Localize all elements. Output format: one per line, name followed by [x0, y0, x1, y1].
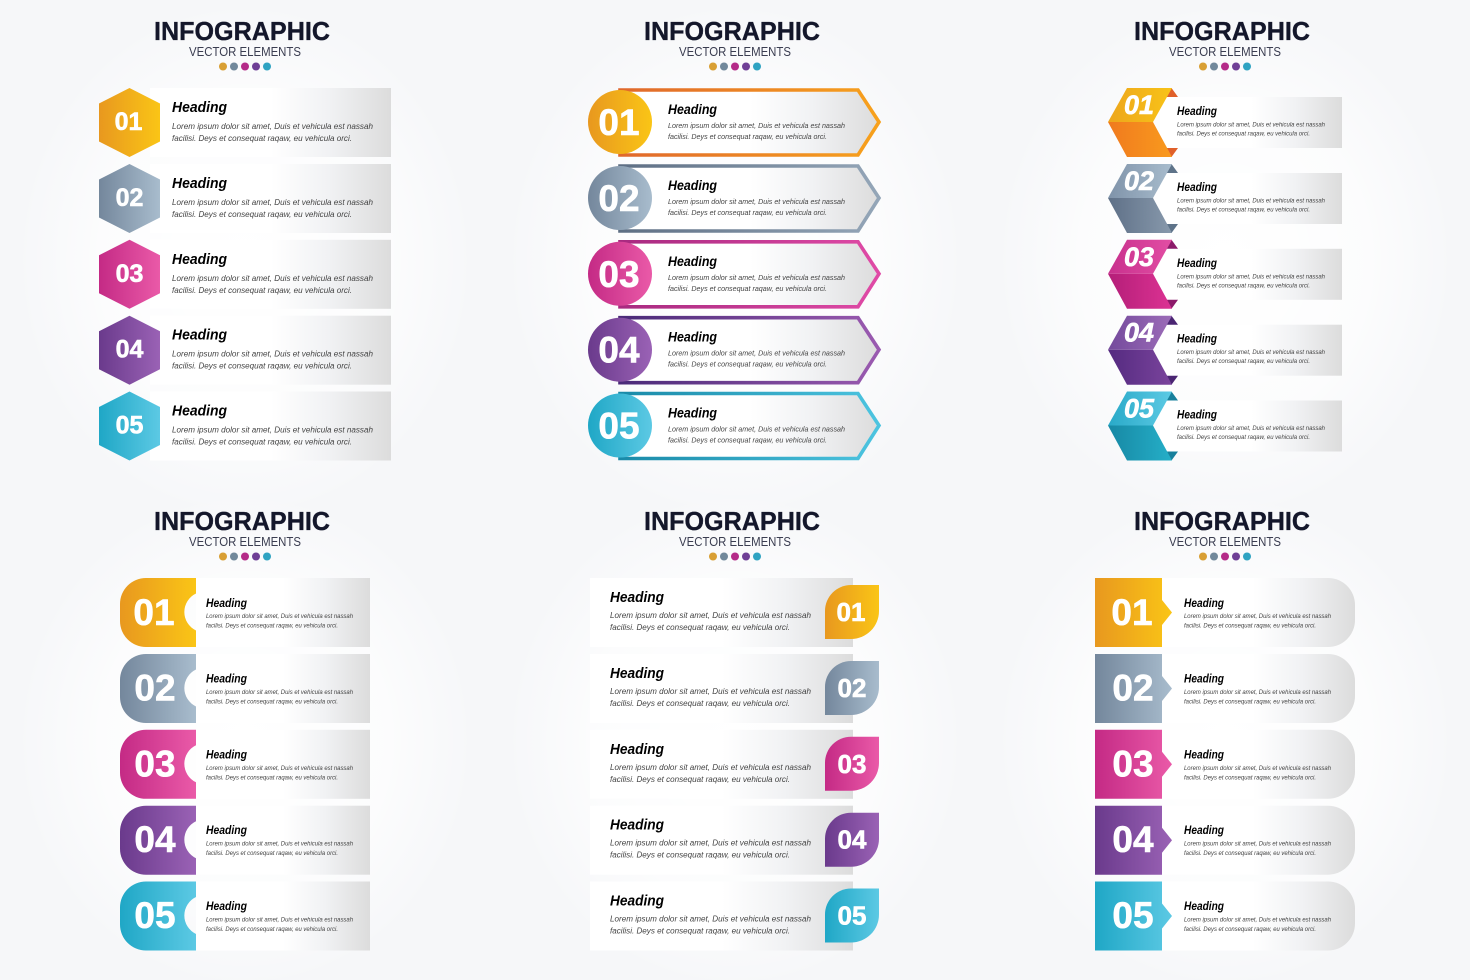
item 02: Heading: [206, 674, 247, 686]
panel: circle and arrow list: [588, 16, 879, 458]
item 04: 04: [598, 330, 640, 371]
panel: leaf badge list: [590, 506, 879, 950]
item 01: [99, 88, 391, 157]
item 01: [588, 90, 879, 155]
heading: panel 1: VECTOR ELEMENTS: [189, 44, 301, 59]
item 04: facilisi. Deys et consequat raqaw, eu vehicula orci.: [1184, 850, 1316, 857]
panel: square pointer list: [1095, 506, 1355, 950]
item 05: facilisi. Deys et consequat raqaw, eu vehicula orci.: [206, 926, 338, 933]
item 05: facilisi. Deys et consequat raqaw, eu vehicula orci.: [610, 926, 790, 936]
item 05: Lorem ipsum dolor sit amet, Duis et vehicula est nassah: [206, 916, 353, 924]
item 05: facilisi. Deys et consequat raqaw, eu vehicula orci.: [1184, 926, 1316, 933]
heading: panel 5: INFOGRAPHIC: [644, 506, 820, 536]
item 01: Heading: [610, 589, 664, 606]
item 04: facilisi. Deys et consequat raqaw, eu vehicula orci.: [172, 361, 352, 371]
item 02: Heading: [610, 665, 664, 682]
item 02: [99, 164, 391, 233]
item 02: [588, 166, 879, 231]
item 01: 01: [1124, 90, 1154, 120]
item 01: Lorem ipsum dolor sit amet, Duis et vehicula est nassah: [668, 121, 845, 130]
item 04: Lorem ipsum dolor sit amet, Duis et vehicula est nassah: [172, 349, 373, 359]
item 04: Lorem ipsum dolor sit amet, Duis et vehicula est nassah: [610, 838, 811, 848]
item 01: facilisi. Deys et consequat raqaw, eu vehicula orci.: [1184, 622, 1316, 630]
item 04: Lorem ipsum dolor sit amet, Duis et vehicula est nassah: [206, 841, 353, 848]
item 01: [1095, 578, 1355, 647]
item 03: Lorem ipsum dolor sit amet, Duis et vehicula est nassah: [1184, 765, 1331, 772]
item 04: Heading: [206, 825, 247, 837]
item 04: 04: [134, 819, 176, 860]
heading: panel 3: INFOGRAPHIC: [1134, 16, 1310, 46]
item 03: Heading: [610, 741, 664, 758]
item 03: facilisi. Deys et consequat raqaw, eu vehicula orci.: [610, 774, 790, 784]
heading: panel 5: VECTOR ELEMENTS: [679, 534, 791, 549]
item 04: [120, 806, 370, 875]
item 01: 01: [598, 102, 640, 143]
heading: panel 4: VECTOR ELEMENTS: [189, 534, 301, 549]
item 02: Lorem ipsum dolor sit amet, Duis et vehicula est nassah: [1184, 689, 1331, 696]
item 05: 05: [1112, 895, 1154, 936]
heading: panel 1: INFOGRAPHIC: [154, 16, 330, 46]
item 02: 02: [116, 184, 143, 212]
heading: panel 1: [154, 16, 330, 70]
item 01: Lorem ipsum dolor sit amet, Duis et vehicula est nassah: [1177, 122, 1325, 128]
item 02: facilisi. Deys et consequat raqaw, eu vehicula orci.: [610, 698, 790, 708]
item 03: Lorem ipsum dolor sit amet, Duis et vehicula est nassah: [668, 273, 845, 282]
item 02: [590, 654, 879, 723]
item 05: [1095, 882, 1355, 950]
item 05: facilisi. Deys et consequat raqaw, eu vehicula orci.: [1177, 434, 1310, 441]
item 03: Heading: [668, 254, 718, 269]
item 05: [99, 392, 391, 460]
item 05: Lorem ipsum dolor sit amet, Duis et vehicula est nassah: [1177, 425, 1325, 432]
item 02: Lorem ipsum dolor sit amet, Duis et vehicula est nassah: [172, 197, 373, 207]
item 04: Lorem ipsum dolor sit amet, Duis et vehicula est nassah: [1177, 349, 1325, 356]
item 01: [120, 578, 370, 647]
item 04: facilisi. Deys et consequat raqaw, eu vehicula orci.: [668, 360, 827, 369]
item 05: [590, 882, 879, 950]
item 04: [1095, 806, 1355, 875]
item 03: 03: [134, 743, 176, 784]
item 01: facilisi. Deys et consequat raqaw, eu vehicula orci.: [668, 132, 827, 141]
heading: panel 5: [644, 506, 820, 560]
item 01: Lorem ipsum dolor sit amet, Duis et vehicula est nassah: [1184, 613, 1331, 620]
item 03: [99, 240, 391, 309]
item 01: Heading: [1184, 598, 1224, 610]
item 05: facilisi. Deys et consequat raqaw, eu vehicula orci.: [172, 436, 352, 446]
item 03: Heading: [172, 251, 227, 268]
item 04: 04: [1124, 318, 1154, 348]
item 03: 03: [1112, 743, 1154, 784]
item 03: Heading: [1177, 258, 1217, 270]
item 03: Lorem ipsum dolor sit amet, Duis et vehicula est nassah: [206, 765, 353, 772]
item 04: Heading: [1184, 825, 1224, 837]
item 05: Lorem ipsum dolor sit amet, Duis et vehicula est nassah: [610, 914, 811, 924]
item 03: Heading: [1184, 749, 1224, 761]
item 03: facilisi. Deys et consequat raqaw, eu vehicula orci.: [668, 284, 827, 293]
item 01: 01: [115, 108, 142, 136]
item 05: [120, 882, 370, 950]
item 04: [588, 318, 879, 383]
item 04: Heading: [668, 330, 718, 345]
item 02: Lorem ipsum dolor sit amet, Duis et vehicula est nassah: [668, 197, 845, 206]
item 05: 05: [1124, 394, 1155, 424]
heading: panel 2: [644, 16, 820, 70]
item 01: Heading: [668, 102, 718, 117]
item 04: facilisi. Deys et consequat raqaw, eu vehicula orci.: [1177, 358, 1310, 365]
heading: panel 3: VECTOR ELEMENTS: [1169, 44, 1281, 59]
item 04: facilisi. Deys et consequat raqaw, eu vehicula orci.: [610, 850, 790, 860]
item 02: 02: [838, 673, 866, 703]
item 02: Lorem ipsum dolor sit amet, Duis et vehicula est nassah: [206, 689, 353, 696]
panel: hexagon list: [99, 16, 391, 460]
panel: notched tab list: [120, 506, 370, 950]
item 01: Lorem ipsum dolor sit amet, Duis et vehicula est nassah: [206, 613, 353, 620]
item 05: 05: [134, 895, 176, 936]
item 02: Heading: [1184, 674, 1224, 686]
item 05: [1108, 392, 1342, 460]
item 01: 01: [837, 597, 865, 627]
heading: panel 4: INFOGRAPHIC: [154, 506, 330, 536]
heading: panel 6: VECTOR ELEMENTS: [1169, 534, 1281, 549]
item 04: [1108, 316, 1342, 385]
item 02: facilisi. Deys et consequat raqaw, eu vehicula orci.: [1177, 206, 1310, 214]
item 01: Lorem ipsum dolor sit amet, Duis et vehicula est nassah: [610, 610, 811, 620]
item 03: Lorem ipsum dolor sit amet, Duis et vehicula est nassah: [610, 762, 811, 772]
item 03: [590, 730, 879, 799]
item 01: facilisi. Deys et consequat raqaw, eu vehicula orci.: [1177, 130, 1310, 138]
item 03: facilisi. Deys et consequat raqaw, eu vehicula orci.: [1177, 282, 1310, 289]
item 05: [588, 394, 879, 458]
heading: panel 6: INFOGRAPHIC: [1134, 506, 1310, 536]
item 02: Lorem ipsum dolor sit amet, Duis et vehicula est nassah: [610, 686, 811, 696]
item 03: 03: [838, 749, 866, 779]
item 04: Heading: [610, 817, 664, 834]
item 05: Heading: [668, 406, 718, 420]
item 04: Heading: [172, 327, 227, 344]
item 03: Lorem ipsum dolor sit amet, Duis et vehicula est nassah: [1177, 273, 1325, 280]
item 02: Lorem ipsum dolor sit amet, Duis et vehicula est nassah: [1177, 198, 1325, 204]
item 04: Heading: [1177, 334, 1217, 346]
item 03: facilisi. Deys et consequat raqaw, eu vehicula orci.: [172, 285, 352, 295]
item 05: Lorem ipsum dolor sit amet, Duis et vehicula est nassah: [172, 424, 373, 434]
item 05: facilisi. Deys et consequat raqaw, eu vehicula orci.: [668, 436, 827, 444]
item 02: Heading: [172, 175, 227, 192]
item 02: facilisi. Deys et consequat raqaw, eu vehicula orci.: [172, 209, 352, 219]
item 05: Heading: [206, 901, 247, 913]
item 04: [99, 316, 391, 385]
item 02: facilisi. Deys et consequat raqaw, eu vehicula orci.: [668, 208, 827, 217]
item 03: 03: [598, 254, 640, 295]
item 01: facilisi. Deys et consequat raqaw, eu vehicula orci.: [610, 622, 790, 632]
item 02: 02: [134, 668, 176, 708]
item 01: 01: [1111, 592, 1153, 633]
item 02: 02: [1124, 166, 1154, 196]
item 05: Lorem ipsum dolor sit amet, Duis et vehicula est nassah: [668, 424, 845, 434]
item 02: Heading: [668, 178, 718, 193]
heading: panel 2: VECTOR ELEMENTS: [679, 44, 791, 59]
heading: panel 3: [1134, 16, 1310, 70]
item 01: [1108, 88, 1342, 157]
item 03: [1095, 730, 1355, 799]
item 01: Heading: [172, 99, 227, 116]
item 03: facilisi. Deys et consequat raqaw, eu vehicula orci.: [1184, 774, 1316, 781]
item 05: Heading: [1177, 410, 1217, 422]
item 03: [120, 730, 370, 799]
item 05: Heading: [172, 402, 227, 420]
panel: folded chevron list: [1108, 16, 1342, 460]
item 04: 04: [1112, 819, 1154, 860]
item 02: [120, 654, 370, 723]
item 03: facilisi. Deys et consequat raqaw, eu vehicula orci.: [206, 774, 338, 781]
item 03: Lorem ipsum dolor sit amet, Duis et vehicula est nassah: [172, 273, 373, 283]
item 02: [1108, 164, 1342, 233]
item 02: 02: [1112, 668, 1154, 708]
item 03: 03: [116, 260, 143, 288]
item 02: facilisi. Deys et consequat raqaw, eu vehicula orci.: [206, 698, 338, 706]
item 01: Heading: [206, 598, 247, 610]
item 04: Lorem ipsum dolor sit amet, Duis et vehicula est nassah: [668, 349, 845, 358]
item 05: 05: [116, 412, 143, 440]
item 04: Lorem ipsum dolor sit amet, Duis et vehicula est nassah: [1184, 841, 1331, 848]
item 05: 05: [838, 900, 866, 930]
item 02: Heading: [1177, 182, 1217, 194]
item 03: [588, 242, 879, 307]
item 04: [590, 806, 879, 875]
item 01: facilisi. Deys et consequat raqaw, eu vehicula orci.: [172, 133, 352, 143]
heading: panel 2: INFOGRAPHIC: [644, 16, 820, 46]
item 01: facilisi. Deys et consequat raqaw, eu vehicula orci.: [206, 622, 338, 630]
item 01: 01: [133, 592, 175, 633]
item 04: 04: [838, 825, 867, 855]
item 04: facilisi. Deys et consequat raqaw, eu vehicula orci.: [206, 850, 338, 857]
item 05: Heading: [610, 892, 664, 910]
item 01: [590, 578, 879, 647]
item 03: Heading: [206, 749, 247, 761]
item 05: 05: [598, 406, 640, 446]
item 03: 03: [1124, 242, 1154, 272]
item 05: Lorem ipsum dolor sit amet, Duis et vehicula est nassah: [1184, 916, 1331, 924]
item 01: Heading: [1177, 106, 1217, 118]
item 02: [1095, 654, 1355, 723]
item 04: 04: [116, 336, 143, 364]
item 01: Lorem ipsum dolor sit amet, Duis et vehicula est nassah: [172, 121, 373, 131]
heading: panel 4: [154, 506, 330, 560]
heading: panel 6: [1134, 506, 1310, 560]
item 03: [1108, 240, 1342, 309]
item 02: 02: [598, 178, 640, 219]
item 02: facilisi. Deys et consequat raqaw, eu vehicula orci.: [1184, 698, 1316, 706]
item 05: Heading: [1184, 901, 1224, 913]
